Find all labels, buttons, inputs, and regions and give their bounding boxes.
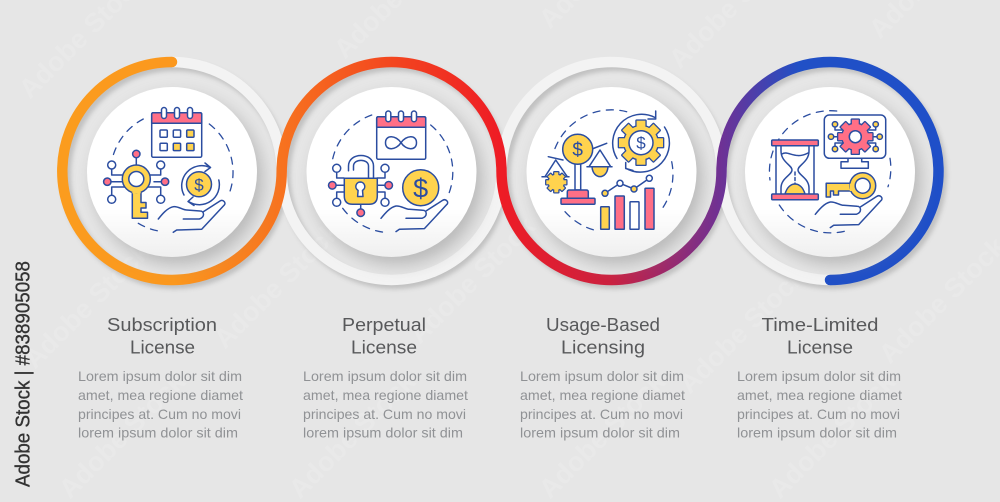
icon: infinity calendar, lock and coin in hand xyxy=(328,111,453,232)
icon: key, calendar and coin in hand: $ xyxy=(194,176,204,194)
infographic canvas: Adobe Stock xyxy=(18,236,157,374)
ring shadows xyxy=(66,66,942,284)
heading: Usage-Based xyxy=(546,314,660,335)
icon: key, calendar and coin in hand xyxy=(104,108,233,232)
panel: time-limited license xyxy=(737,87,921,440)
panel: usage-based licensing xyxy=(520,87,702,440)
heading xyxy=(342,314,426,358)
stock image id: Adobe Stock | #838905058 xyxy=(12,261,34,487)
infographic canvas: Adobe Stock xyxy=(533,366,672,502)
description: lorem ipsum dolor sit dim xyxy=(303,426,463,440)
description: amet, mea regione diamet xyxy=(78,388,243,403)
heading: Subscription xyxy=(107,314,217,335)
description: principes at. Cum no movi xyxy=(520,407,683,422)
icon: scales, gear coin and bar chart: $ xyxy=(572,140,583,161)
heading xyxy=(762,314,878,358)
description: Lorem ipsum dolor sit dim xyxy=(303,369,467,384)
description: lorem ipsum dolor sit dim xyxy=(737,426,897,440)
icon: hourglass, monitor gear and key in hand xyxy=(769,111,891,233)
heading: License xyxy=(351,336,417,358)
description: amet, mea regione diamet xyxy=(520,388,685,403)
infographic canvas: Adobe Stock xyxy=(673,261,812,399)
description xyxy=(737,369,902,440)
coloured progress line xyxy=(62,62,939,280)
description xyxy=(303,369,468,440)
description: principes at. Cum no movi xyxy=(78,407,241,422)
icon: infinity calendar, lock and coin in hand: $ xyxy=(413,174,428,204)
description: Lorem ipsum dolor sit dim xyxy=(737,369,901,384)
heading xyxy=(546,314,660,358)
infographic canvas: Adobe Stock xyxy=(208,216,347,354)
icon: scales, gear coin and bar chart: $ xyxy=(636,134,646,153)
description: amet, mea regione diamet xyxy=(303,388,468,403)
description: Lorem ipsum dolor sit dim xyxy=(78,369,242,384)
heading xyxy=(107,314,217,358)
description xyxy=(78,369,243,440)
description: Lorem ipsum dolor sit dim xyxy=(520,369,684,384)
panel: perpetual license xyxy=(303,87,482,440)
heading: Perpetual xyxy=(342,314,426,335)
heading: Time-Limited xyxy=(762,314,878,335)
infographic canvas: Adobe Stock xyxy=(283,366,422,502)
heading: Licensing xyxy=(561,336,645,358)
description: amet, mea regione diamet xyxy=(737,388,902,403)
heading: License xyxy=(130,336,195,358)
infographic canvas: Adobe Stock xyxy=(53,366,192,502)
infographic canvas: Adobe Stock xyxy=(763,366,902,502)
description: principes at. Cum no movi xyxy=(303,407,466,422)
icon: scales, gear coin and bar chart xyxy=(542,110,673,230)
infographic canvas: Adobe Stock xyxy=(403,211,542,349)
heading: License xyxy=(787,336,853,358)
description xyxy=(520,369,685,440)
description: lorem ipsum dolor sit dim xyxy=(78,426,238,440)
description: lorem ipsum dolor sit dim xyxy=(520,426,680,440)
description: principes at. Cum no movi xyxy=(737,407,900,422)
panel: subscription license xyxy=(78,87,263,440)
light unfilled ring segments xyxy=(172,62,830,280)
